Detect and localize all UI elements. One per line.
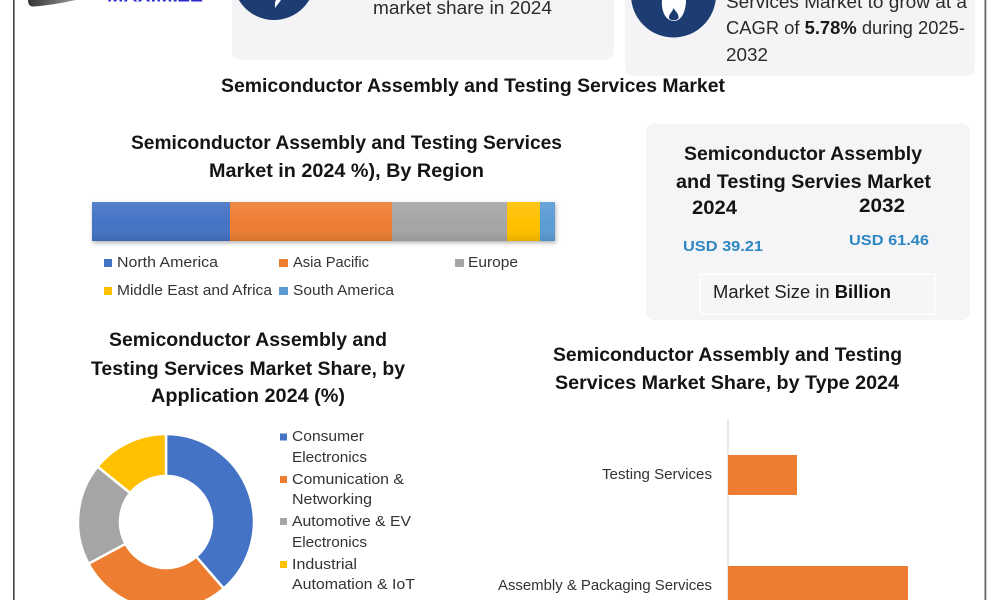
legend: application: Networking — [292, 491, 372, 508]
logo — [28, 0, 203, 6]
year and value 2032: USD 61.46 — [849, 232, 929, 249]
bar chart: by type: Assembly & Packaging Services — [498, 577, 712, 594]
legend: application: Comunication & — [292, 471, 404, 488]
panel: market share callout — [232, 0, 614, 60]
legend: region: Middle East and Africa — [117, 282, 273, 299]
panel: market size — [646, 124, 970, 320]
heading: by type: Services Market Share, by Type 2024 — [555, 373, 899, 394]
heading: by application: Application 2024 (%) — [151, 386, 345, 407]
legend: region: Europe — [468, 254, 518, 271]
legend: application: Consumer — [292, 428, 364, 445]
legend: region: South America — [293, 282, 395, 299]
year and value 2032: 2032 — [859, 196, 905, 217]
year and value 2024: 2024 — [692, 198, 737, 219]
heading: by type: Semiconductor Assembly and Testing — [553, 345, 902, 366]
market size heading — [676, 144, 932, 193]
heading: by application: Semiconductor Assembly and — [109, 330, 387, 351]
heading: by type — [553, 345, 902, 394]
heading: by application — [91, 330, 405, 407]
legend: region — [104, 254, 518, 299]
CAGR text: 2032 — [726, 45, 768, 65]
market size heading: and Testing Servies Market — [676, 172, 932, 193]
heading: by region: Market in 2024 %), By Region — [209, 161, 484, 182]
unit box: Market Size in Billion — [713, 282, 891, 302]
donut chart: by application — [78, 434, 254, 600]
year and value 2032 — [849, 196, 929, 249]
market size heading: Semiconductor Assembly — [684, 144, 922, 165]
year and value 2024 — [683, 198, 763, 255]
bar chart: by type — [498, 419, 908, 600]
legend: region: North America — [117, 254, 219, 271]
legend: region: Asia Pacific — [293, 254, 369, 271]
icon: flame badge — [631, 0, 716, 38]
heading: by region: Semiconductor Assembly and Testing Services — [131, 133, 562, 154]
year and value 2024: USD 39.21 — [683, 238, 763, 255]
unit box — [700, 274, 935, 314]
heading: by application: Testing Services Market Share, by — [91, 359, 405, 380]
bar chart: by type: Testing Services — [602, 466, 712, 483]
CAGR text: CAGR of 5.78% during 2025- — [726, 18, 965, 38]
legend: application: Industrial — [292, 556, 357, 573]
panel: CAGR callout — [625, 0, 975, 76]
heading: by region — [131, 133, 562, 182]
legend: application — [280, 428, 415, 593]
icon: market share badge — [233, 0, 315, 20]
legend: application: Electronics — [292, 534, 367, 551]
title: Semiconductor Assembly and Testing Services Market — [221, 76, 726, 97]
CAGR text — [726, 0, 968, 65]
legend: application: Electronics — [292, 449, 367, 466]
legend: application: Automation & IoT — [292, 576, 415, 593]
legend: application: Automotive & EV — [292, 513, 411, 530]
stacked bar chart: by region — [92, 202, 555, 241]
